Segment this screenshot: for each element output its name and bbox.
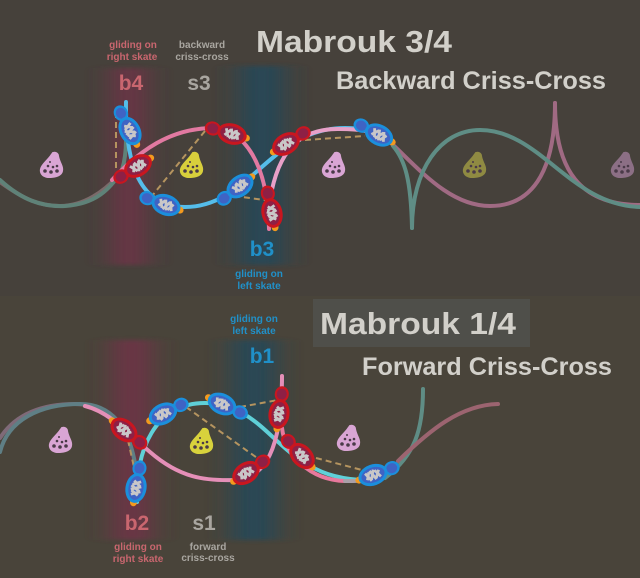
- label: b1 gliding on left skate: left skate: [232, 326, 276, 337]
- title: Mabrouk 3/4: Mabrouk 3/4: [256, 24, 453, 59]
- subtitle: Backward Criss-Cross: Backward Criss-Cross: [336, 67, 606, 95]
- label: b4 gliding on right skate: right skate: [107, 52, 158, 63]
- path: pink skating curve: [112, 128, 269, 229]
- skates: lower sequence: [103, 385, 403, 508]
- label: b1 gliding on left skate: gliding on: [230, 314, 278, 325]
- label: b2 gliding on right skate: gliding on: [114, 542, 162, 553]
- path: pink skating curve 2: [282, 428, 345, 481]
- band: left skate lower: [232, 340, 276, 540]
- weight transfer lines: [128, 400, 362, 472]
- label: b2 gliding on right skate: [113, 512, 164, 565]
- label: b4 gliding on right skate: b4: [119, 72, 144, 95]
- band: right skate lower: [112, 340, 152, 540]
- diagram: upper tracings: [0, 102, 640, 229]
- path: cyan skating curve: [137, 403, 360, 502]
- label: b2 gliding on right skate: b2: [125, 512, 149, 535]
- lower background: [0, 296, 640, 578]
- label: b3 gliding on left skate: gliding on: [235, 269, 283, 280]
- path: pink skating curve: [85, 376, 282, 480]
- path: blue skating curve: [126, 102, 392, 207]
- label: b2 gliding on right skate: right skate: [113, 554, 164, 565]
- label: s1 forward criss-cross: forward: [190, 542, 226, 553]
- label: b1 gliding on left skate: b1: [250, 345, 275, 368]
- label: s1 forward criss-cross: s1: [192, 512, 216, 535]
- title highlight box: [313, 299, 530, 347]
- label: b1 gliding on left skate: [230, 314, 278, 368]
- skates: upper sequence: [108, 101, 400, 233]
- label: b3 gliding on left skate: [235, 238, 283, 292]
- weight transfer lines: [116, 112, 365, 200]
- path: pink skating curve 2: [270, 129, 385, 200]
- label: s3 backward criss-cross: s3: [187, 72, 211, 95]
- cones: upper row: [40, 152, 634, 178]
- label: s3 backward criss-cross: [175, 40, 229, 95]
- label: b4 gliding on right skate: [107, 40, 158, 95]
- cones: lower row: [49, 425, 360, 454]
- band: left skate upper: [240, 66, 284, 265]
- title: Mabrouk 1/4: Mabrouk 1/4: [320, 306, 517, 341]
- band: right skate upper: [112, 68, 146, 265]
- label: s3 backward criss-cross: criss-cross: [175, 52, 229, 63]
- label: b4 gliding on right skate: gliding on: [109, 40, 157, 51]
- label: s3 backward criss-cross: backward: [179, 40, 225, 51]
- subtitle: Forward Criss-Cross: Forward Criss-Cross: [362, 353, 612, 381]
- label: s1 forward criss-cross: [181, 512, 235, 564]
- label: b3 gliding on left skate: left skate: [237, 281, 281, 292]
- label: b3 gliding on left skate: b3: [250, 238, 274, 261]
- diagram: lower tracings: [0, 376, 498, 502]
- label: s1 forward criss-cross: criss-cross: [181, 553, 235, 564]
